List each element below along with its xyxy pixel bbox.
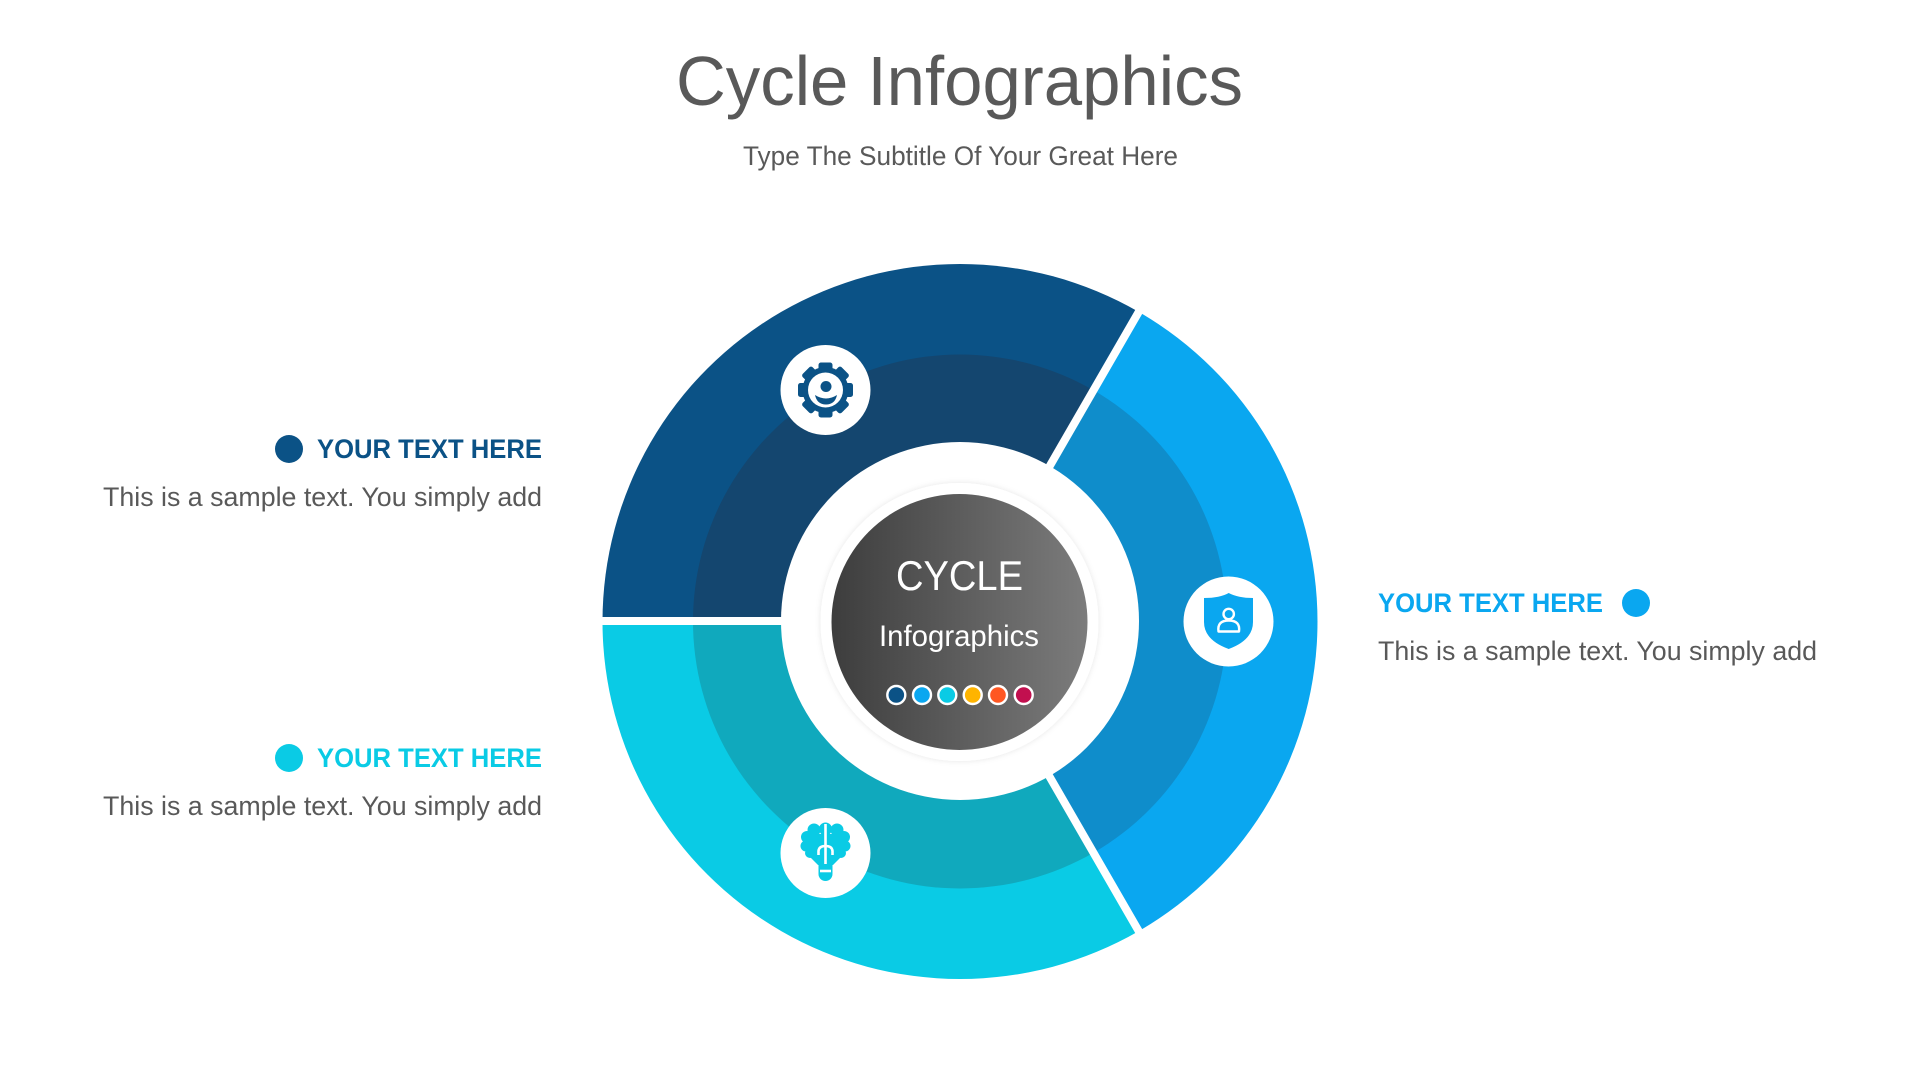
segment: cyan: [602, 622, 1139, 979]
segment: light blue: [960, 312, 1317, 931]
segment: dark blue: [602, 264, 1139, 622]
callout: light blue: [1378, 588, 1817, 666]
icon: shield with person: [1184, 576, 1274, 666]
palette dots: [887, 686, 1033, 704]
callout body: This is a sample text. You simply add: [1378, 636, 1817, 666]
centre hub: [820, 483, 1098, 761]
callout: cyan: [103, 743, 542, 821]
cycle diagram: [590, 264, 1317, 979]
callout heading: YOUR TEXT HERE: [317, 743, 542, 773]
subtitle: Type The Subtitle Of Your Great Here: [743, 141, 1178, 171]
icon: brain light bulb: [780, 808, 870, 898]
title: Cycle Infographics: [676, 42, 1243, 120]
icon: gear with person: [780, 345, 870, 435]
callout heading: YOUR TEXT HERE: [317, 434, 542, 464]
callout body: This is a sample text. You simply add: [103, 791, 542, 821]
callout heading: YOUR TEXT HERE: [1378, 588, 1603, 618]
hub heading: CYCLE: [896, 552, 1023, 599]
callout: dark blue: [103, 434, 542, 512]
callout body: This is a sample text. You simply add: [103, 482, 542, 512]
hub subheading: Infographics: [879, 620, 1039, 653]
